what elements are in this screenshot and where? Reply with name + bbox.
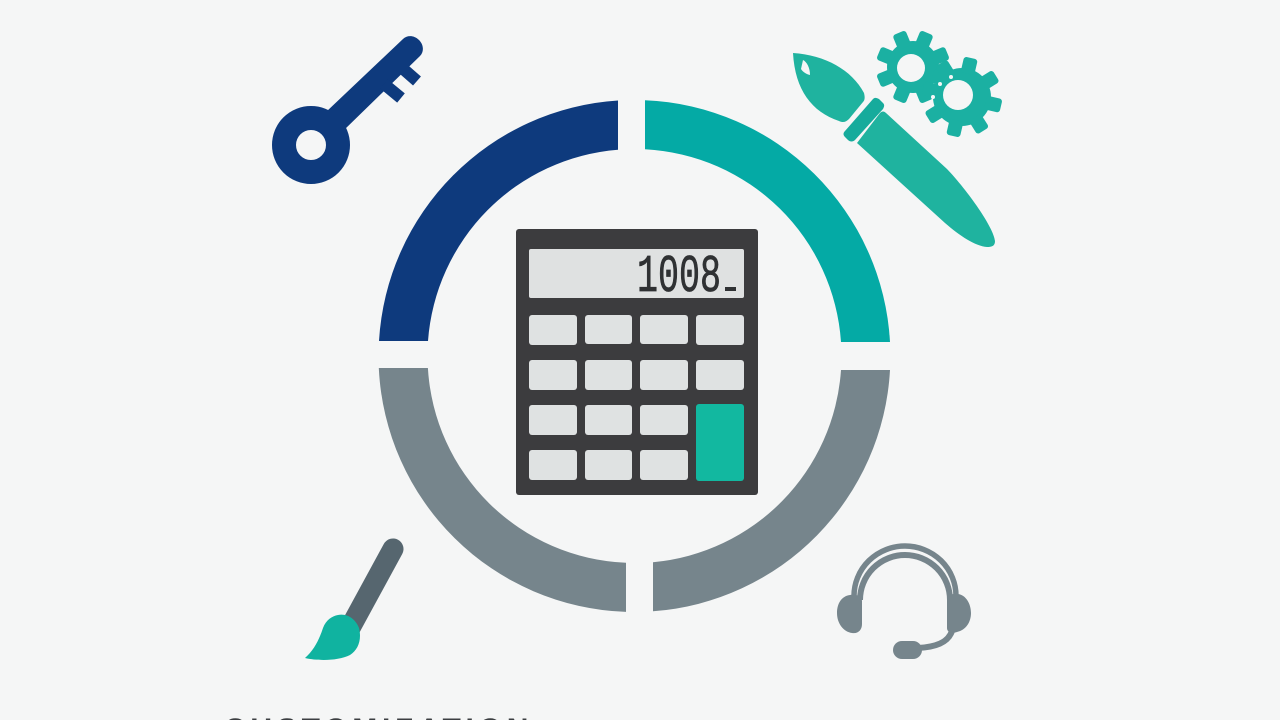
brush handle bbox=[857, 112, 995, 247]
icon: small paintbrush bbox=[305, 549, 393, 660]
ring segment: gray bottom-right bbox=[653, 370, 890, 611]
microphone bbox=[893, 641, 922, 659]
microphone arm bbox=[918, 631, 952, 648]
small brush handle bbox=[350, 549, 393, 628]
left ear cup bbox=[837, 595, 862, 633]
brush head highlight bbox=[801, 60, 810, 75]
display cursor bbox=[725, 287, 736, 291]
calculator display bbox=[529, 249, 744, 307]
brush ferrule bbox=[844, 98, 884, 142]
calculator equals key bbox=[696, 404, 744, 481]
calculator keys bbox=[529, 315, 744, 480]
icon: headset bbox=[837, 546, 971, 659]
icon: key bbox=[284, 36, 423, 172]
display reading: 1008 bbox=[637, 249, 721, 307]
key shaft bbox=[326, 36, 423, 131]
key teeth bbox=[384, 67, 417, 98]
icon: calculator bbox=[516, 229, 758, 495]
small brush bristles bbox=[305, 615, 360, 660]
headband outer bbox=[854, 546, 956, 596]
ring segment: navy top-left bbox=[379, 100, 618, 341]
ring segment: gray bottom-left bbox=[379, 368, 626, 612]
gear right bbox=[921, 56, 1003, 138]
calculator body bbox=[516, 229, 758, 495]
key bow bbox=[284, 118, 338, 172]
headband inner bbox=[860, 555, 950, 600]
icon: paintbrush bbox=[793, 53, 995, 247]
gear holes and specks bbox=[897, 54, 973, 110]
ring segment: teal top-right bbox=[645, 100, 890, 342]
gear left bbox=[876, 30, 950, 104]
right ear cup bbox=[947, 594, 971, 633]
brush head bbox=[793, 53, 865, 122]
icon: gears bbox=[876, 30, 1003, 138]
